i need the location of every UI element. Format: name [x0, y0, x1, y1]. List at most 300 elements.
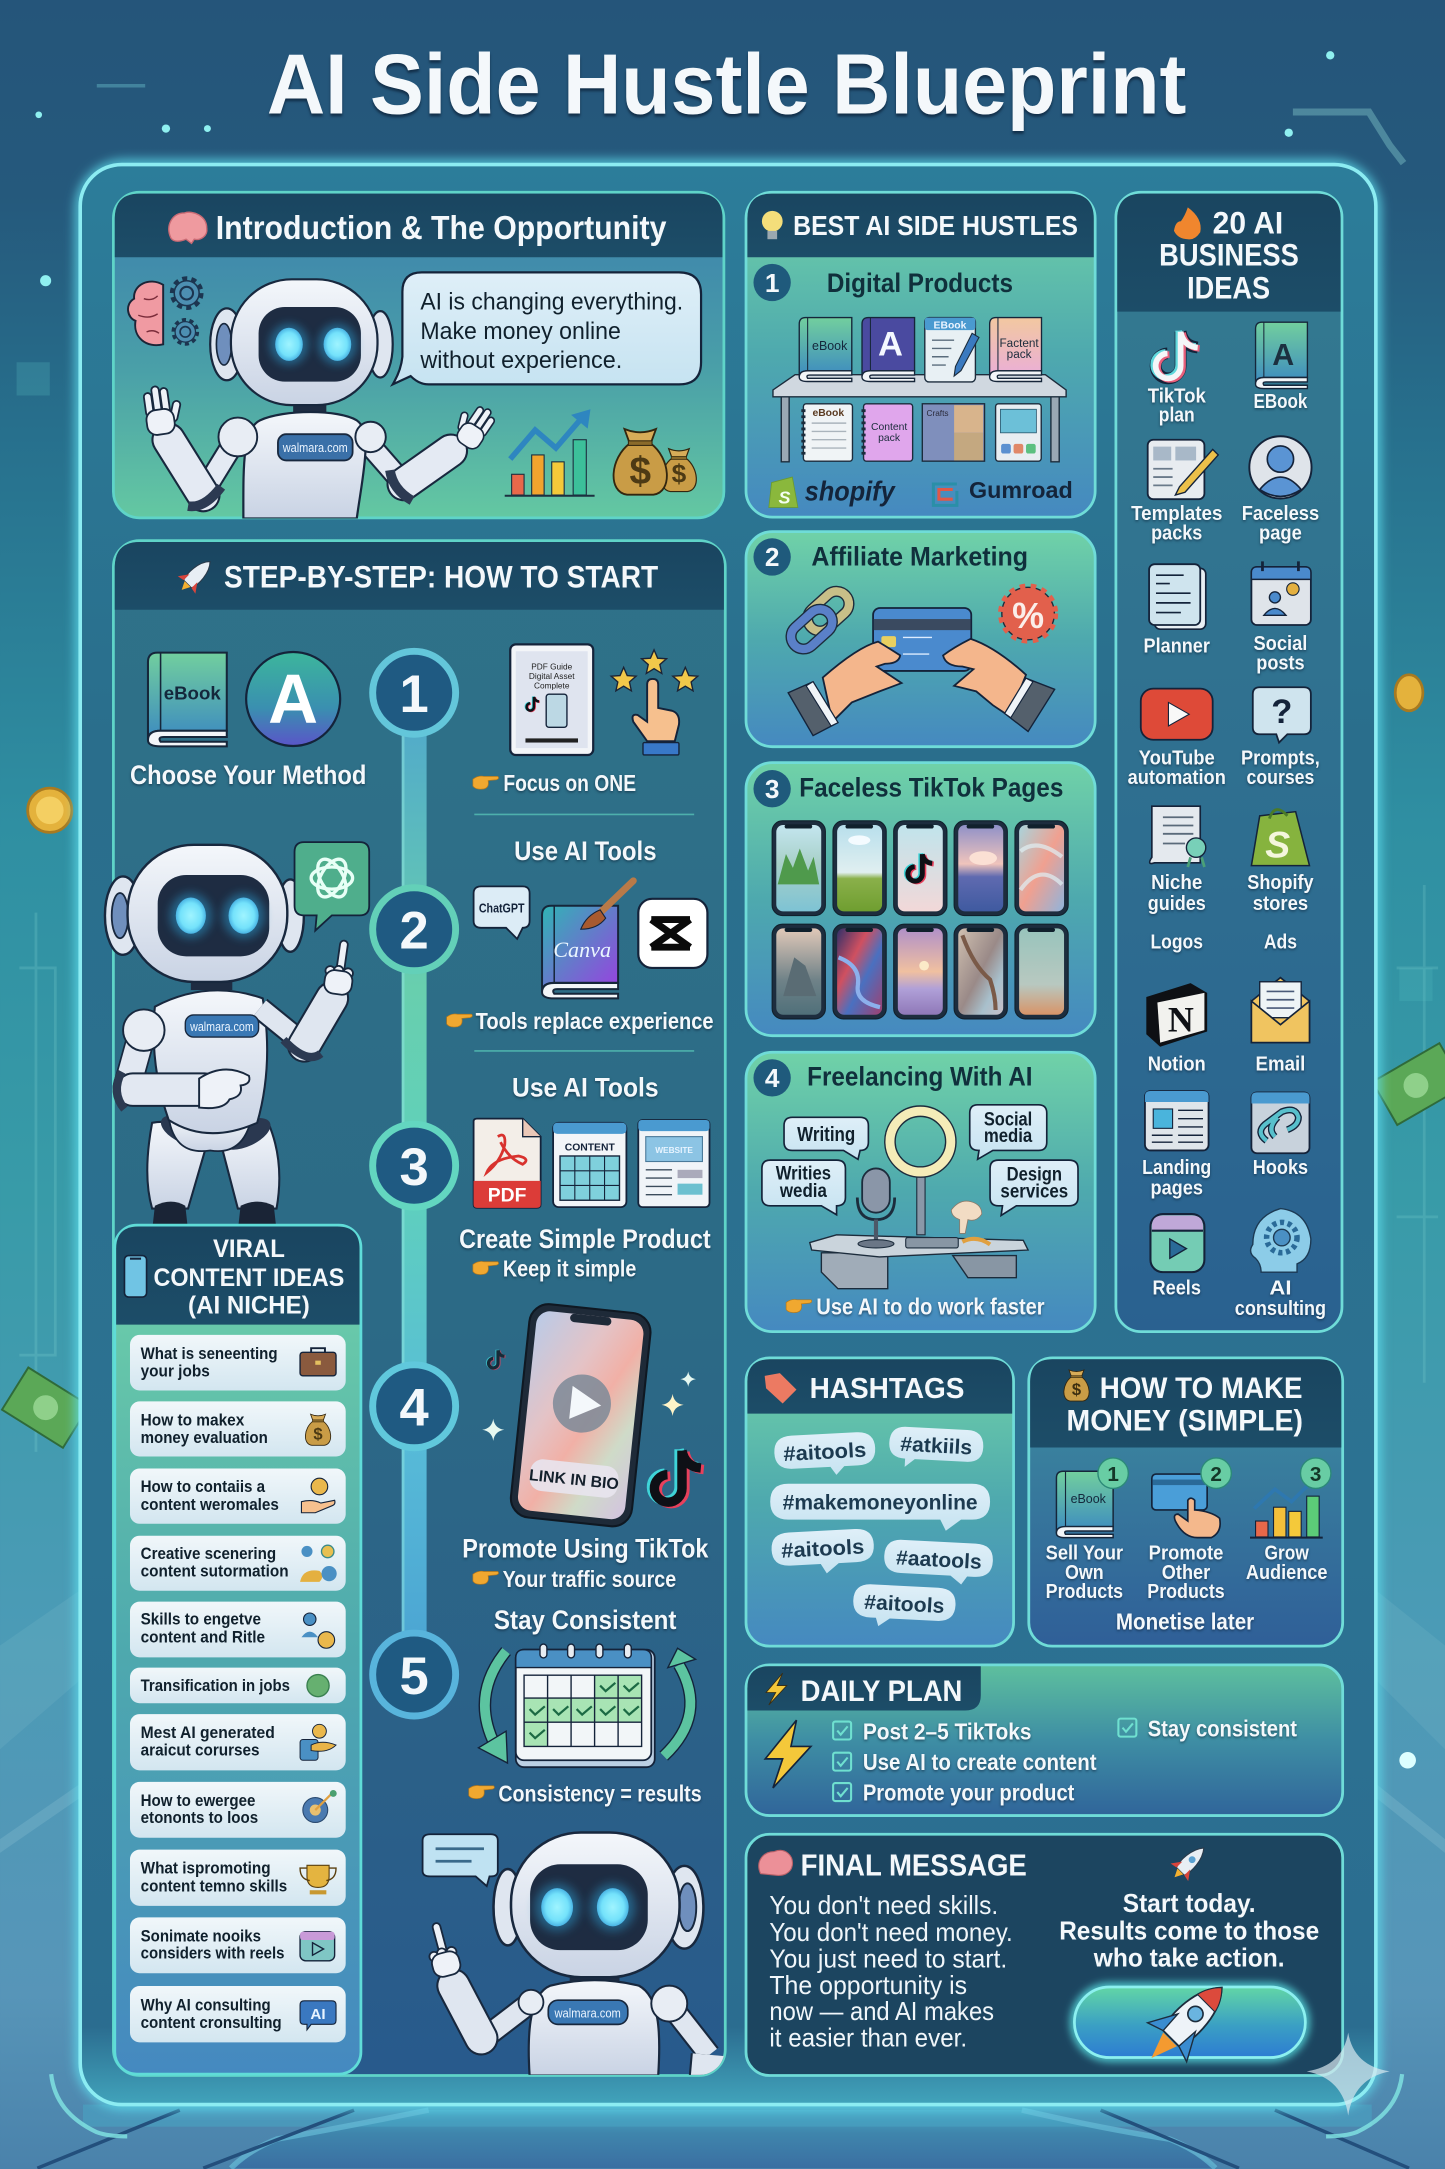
logo: gumroad: [933, 477, 1073, 505]
icon: microphone: [857, 1168, 895, 1248]
bubble: social media: Social: [984, 1108, 1032, 1130]
panel: viral content ideas: [115, 1225, 361, 2074]
panel: step-by-step: [105, 541, 725, 2102]
idea: shopify stores: Shopify: [1247, 872, 1314, 894]
checklist: [833, 1716, 1297, 1805]
bubble: design services: [990, 1160, 1078, 1215]
panel header: viral content: VIRAL: [213, 1235, 285, 1263]
number badge 1: [753, 264, 791, 301]
option: promote other products: [1147, 1458, 1231, 1603]
robot: bottom waving: [421, 1833, 709, 2102]
idea: social posts: Social: [1253, 633, 1307, 655]
text: final message body: The opportunity is: [769, 1972, 967, 2000]
hashtag chip 2: #atkiils: [900, 1433, 973, 1459]
icon: content pack: Content: [871, 422, 907, 433]
idea row 2: [130, 1401, 346, 1456]
icon: money bag: [305, 1414, 331, 1445]
icon: hands holding card: [788, 608, 1055, 736]
speech bubble: intro: Make money online: [420, 318, 621, 345]
number badge 3: [753, 770, 791, 807]
hashtag chip 1: #aitools: [783, 1439, 867, 1466]
panel: best ai side hustles card 1: [746, 192, 1095, 517]
idea row 11: content cronsulting: [141, 2013, 282, 2032]
idea row 6: [130, 1668, 346, 1703]
idea: notion: Notion: [1148, 1053, 1206, 1075]
heading: digital products: Digital Products: [827, 268, 1013, 298]
item: promote product: Promote your product: [863, 1779, 1075, 1805]
idea: ebook: EBook: [1253, 391, 1308, 413]
idea row 4: content sutormation: [141, 1561, 289, 1580]
icon: money bags: $: [629, 450, 651, 493]
idea: ai consulting: consulting: [1235, 1298, 1326, 1320]
icon: percent badge: %: [1012, 595, 1044, 636]
panel: final message: [746, 1834, 1343, 2077]
icon: AI chat bubble: AI: [310, 2006, 326, 2023]
chart: growth bars: [505, 409, 595, 496]
option: sell your own products: Sell Your: [1046, 1541, 1123, 1564]
icon: content calendar: [553, 1123, 626, 1207]
idea: social posts: [1251, 561, 1311, 674]
panel header: 20 ai business ideas: IDEAS: [1187, 271, 1270, 306]
panel header: introduction: Introduction & The Opportunity: [216, 210, 667, 247]
panel header: best ai side hustles: BEST AI SIDE HUSTLES: [793, 210, 1078, 241]
bubble: writing: Writing: [797, 1124, 855, 1146]
icon: image collage: [922, 404, 985, 461]
heading: use ai tools second: Use AI Tools: [512, 1073, 659, 1103]
idea row 9: content temno skills: [141, 1877, 287, 1896]
text: final message body: You don't need skills.: [769, 1892, 998, 1920]
icon: pdf: PDF: [488, 1185, 527, 1207]
option: grow audience: 3: [1310, 1463, 1321, 1486]
icon: pdf guide: [510, 644, 593, 755]
icon: light bulb: [762, 211, 783, 239]
panel: affiliate marketing: [746, 532, 1095, 747]
icon: website: WEBSITE: [655, 1145, 693, 1155]
icon: banknote right: [1372, 1043, 1445, 1125]
idea: niche guides: [1148, 806, 1206, 915]
bubble: writies wedia: wedia: [779, 1180, 827, 1202]
panel header: 20 ai business ideas: 20 AI: [1213, 206, 1283, 241]
speech bubble: intro: [393, 272, 701, 384]
button: rocket launch: [1074, 1968, 1305, 2077]
icon: hand with coin: [301, 1478, 335, 1513]
panel: 20 ai business ideas: [1116, 192, 1342, 1332]
idea: planner: [1144, 564, 1210, 658]
idea: templates packs: packs: [1151, 522, 1202, 544]
icon: money bags: $: [672, 459, 687, 489]
icon: big bolt: [765, 1720, 811, 1788]
icon: brain and gears: [128, 279, 201, 345]
icon: notebook: eBook: [812, 408, 844, 419]
idea row 1: What is seneenting: [141, 1344, 278, 1363]
icon: capcut: [638, 899, 707, 968]
step number 3: 3: [400, 1138, 429, 1197]
idea row 8: [130, 1782, 346, 1838]
idea: prompts courses: [1241, 687, 1320, 789]
icon: pdf guide: Complete: [534, 681, 570, 691]
idea: tiktok plan: TikTok: [1148, 385, 1207, 407]
phone 9: [954, 924, 1007, 1019]
icon: money bag: $: [1072, 1380, 1081, 1399]
step number 2: [373, 888, 456, 971]
panel header: viral content: (AI NICHE): [188, 1292, 310, 1320]
heading: final message: FINAL MESSAGE: [801, 1848, 1027, 1882]
icon: briefcase: [300, 1348, 336, 1376]
idea row 8: How to ewergee: [141, 1791, 255, 1810]
title: AI Side Hustle Blueprint: [267, 36, 1186, 132]
idea: shopify stores: [1247, 810, 1314, 915]
idea: prompts courses: ?: [1271, 693, 1292, 731]
idea: planner: Planner: [1144, 636, 1210, 658]
idea row 4: [130, 1536, 346, 1591]
icon: percent badge: [1000, 586, 1056, 641]
icon: content pack: pack: [878, 433, 901, 444]
idea row 10: considers with reels: [141, 1944, 284, 1963]
bubble: writies wedia: Writies: [776, 1162, 831, 1184]
step number 3: [373, 1124, 456, 1207]
panel header: best ai side hustles: [747, 194, 1094, 257]
heading: promote using tiktok: Promote Using TikTok: [462, 1534, 709, 1564]
idea: landing pages: [1142, 1091, 1211, 1200]
option: grow audience: Audience: [1246, 1561, 1327, 1584]
hashtag chip 2: [888, 1426, 984, 1471]
phone 2: [833, 821, 886, 916]
idea: tiktok plan: plan: [1159, 405, 1195, 427]
idea: shopify stores: stores: [1253, 893, 1308, 915]
text: call to action: Start today.: [1123, 1890, 1256, 1918]
panel: how to make money: [1029, 1358, 1343, 1646]
note: tools replace experience: Tools replace experience: [476, 1008, 714, 1034]
text: final message body: [769, 1892, 1013, 2052]
panel header: how to make money: [1030, 1359, 1341, 1447]
hashtag chip 3: #makemoneyonline: [783, 1490, 978, 1514]
icon: A book: [862, 318, 915, 382]
icon: chatgpt logo bubble: [295, 842, 369, 931]
idea: ai consulting: AI: [1269, 1277, 1292, 1299]
idea row 7: araicut corurses: [141, 1740, 260, 1759]
panel header: 20 ai business ideas: BUSINESS: [1159, 237, 1299, 272]
idea: notion: N: [1168, 1000, 1194, 1040]
hashtag chip 6: [852, 1583, 956, 1630]
option: promote other products: Promote: [1149, 1541, 1223, 1564]
idea row 9: What ispromoting: [141, 1859, 271, 1878]
icon: pdf guide: Digital Asset: [529, 671, 575, 681]
icon: pdf: [474, 1119, 541, 1208]
phone 1: [772, 821, 825, 916]
logo: shopify: S: [779, 487, 791, 507]
option: promote other products: Other: [1162, 1561, 1210, 1584]
logo: shopify: [769, 476, 896, 507]
icon: tiktok logo: [651, 1449, 704, 1504]
step number 4: [373, 1365, 456, 1448]
icon: ebook checklist: [925, 318, 979, 382]
option: sell your own products: eBook: [1071, 1492, 1107, 1506]
idea row 5: [130, 1602, 346, 1657]
icon: corner sparkle: [1307, 2033, 1390, 2116]
phone 8: [894, 924, 947, 1019]
idea: email: [1251, 978, 1309, 1075]
phone 7: [833, 924, 886, 1019]
panel header: introduction: [115, 194, 722, 257]
icon: ebook: eBook: [812, 339, 848, 353]
idea row 11: [130, 1986, 346, 2042]
idea: faceless page: Faceless: [1242, 503, 1319, 525]
idea row 7: [130, 1714, 346, 1770]
icon: ebook: [799, 318, 852, 382]
hashtag chip 3: [770, 1484, 990, 1531]
step number 1: [373, 651, 456, 734]
idea row 5: content and Ritle: [141, 1628, 265, 1647]
idea: niche guides: guides: [1148, 893, 1206, 915]
step number 4: 4: [400, 1379, 429, 1438]
idea: notion: [1146, 983, 1207, 1075]
idea row 10: [130, 1917, 346, 1973]
idea row 1: [130, 1335, 346, 1391]
label: choose your method: Choose Your Method: [130, 760, 366, 790]
idea: youtube automation: YouTube: [1139, 748, 1215, 770]
idea: hooks: Hooks: [1253, 1157, 1308, 1179]
phone 3: [894, 821, 947, 916]
idea: ai consulting: [1235, 1209, 1326, 1320]
panel header: 20 ai business ideas: [1117, 194, 1341, 312]
note: monetise later: Monetise later: [1116, 1609, 1254, 1635]
idea row 7: Mest AI generated: [141, 1723, 275, 1742]
icon: green globe: [307, 1675, 329, 1697]
icon: book and coin: [300, 1724, 336, 1760]
icon: chatgpt bubble: ChatGPT: [479, 901, 524, 916]
idea: youtube automation: [1128, 689, 1226, 789]
phone grid: [772, 821, 1068, 1019]
option: grow audience: Grow: [1265, 1541, 1310, 1564]
phone 10: [1015, 924, 1068, 1019]
option: grow audience: [1246, 1458, 1331, 1584]
option: sell your own products: [1046, 1458, 1128, 1603]
idea row 10: Sonimate nooiks: [141, 1926, 261, 1945]
phone 5: [1015, 821, 1068, 916]
panel: faceless tiktok pages: [746, 763, 1095, 1036]
panel header: hashtags: [747, 1359, 1012, 1414]
panel header: viral content: CONTENT IDEAS: [153, 1264, 344, 1292]
heading: use ai tools: Use AI Tools: [514, 836, 657, 866]
number badge 2: [753, 538, 791, 576]
icon: left cycle arrow: [478, 1651, 507, 1763]
text: final message body: it easier than ever.: [769, 2024, 967, 2052]
idea: niche guides: Niche: [1151, 872, 1202, 894]
idea row 4: Creative scenering: [141, 1544, 276, 1563]
bubble: social media: [970, 1105, 1047, 1159]
bubble: social media: media: [984, 1125, 1032, 1147]
hashtag chip 5: #aatools: [895, 1546, 982, 1574]
icon: gold coin right: [1395, 675, 1423, 711]
number badge 3: 3: [765, 774, 779, 804]
bubble: design services: services: [1000, 1180, 1068, 1202]
bubble: design services: Design: [1007, 1163, 1062, 1185]
icon: fire: [1174, 207, 1201, 239]
note: consistency equals results: Consistency = results: [498, 1781, 702, 1807]
icon: money bag: $: [313, 1424, 323, 1443]
idea: faceless page: page: [1259, 522, 1302, 544]
phone 4: [954, 821, 1007, 916]
icon: sparkles: [482, 1371, 696, 1441]
idea: logos: Logos: [1150, 932, 1203, 954]
option: sell your own products: Own: [1065, 1561, 1104, 1584]
icon: small rocket: [1166, 1839, 1213, 1886]
idea: landing pages: pages: [1150, 1178, 1203, 1200]
bubble: writies wedia: [762, 1160, 845, 1215]
hashtag chip 5: [883, 1539, 994, 1586]
idea: faceless page: [1242, 436, 1319, 544]
hashtag chip 1: [773, 1431, 876, 1478]
robot: chatgpt pointing: [105, 845, 358, 1231]
idea: templates packs: Templates: [1131, 503, 1222, 525]
icon: content pack: [864, 404, 913, 461]
logo: shopify: shopify: [805, 476, 896, 507]
panel header: step-by-step: [115, 542, 724, 610]
note: use ai to do work faster: Use AI to do work faster: [816, 1294, 1045, 1320]
heading: faceless tiktok pages: Faceless TikTok Pages: [799, 772, 1063, 802]
text: final message body: You just need to start.: [769, 1946, 1007, 1974]
shelf: digital products: [773, 318, 1066, 462]
step number 1: 1: [400, 665, 429, 724]
icon: desk setup: [810, 1201, 1028, 1289]
icon: banknote left: [2, 1367, 89, 1448]
phone 6: [772, 924, 825, 1019]
step number 5: [373, 1633, 456, 1716]
idea: prompts courses: Prompts,: [1241, 748, 1320, 770]
icon: right cycle arrow: [664, 1648, 696, 1756]
icon: trophy: [300, 1865, 336, 1894]
icon: target: [303, 1790, 337, 1822]
icon: notebook: [803, 404, 852, 461]
heading: affiliate marketing: Affiliate Marketing: [811, 542, 1028, 572]
option: sell your own products: 1: [1107, 1463, 1119, 1486]
idea: ebook: A: [1272, 338, 1294, 372]
idea: youtube automation: automation: [1128, 767, 1226, 789]
step number 2: 2: [400, 902, 429, 961]
panel header: hashtags: HASHTAGS: [810, 1373, 964, 1405]
text: call to action: [1059, 1890, 1319, 1973]
hashtag chip 4: [771, 1528, 875, 1576]
text: final message body: You don't need money.: [769, 1919, 1013, 1947]
idea row 9: [130, 1850, 346, 1906]
icon: tilted phone: LINK IN BIO: [528, 1467, 620, 1493]
idea row 2: How to makex: [141, 1410, 245, 1429]
speech bubble: intro: without experience.: [419, 347, 622, 374]
panel: daily plan: [746, 1665, 1343, 1816]
icon: chatgpt bubble: [474, 886, 530, 939]
icon: gold coin left: [28, 788, 72, 832]
robot: bottom waving: walmara.com: [554, 2005, 621, 2020]
icon: person and coin: [301, 1613, 335, 1648]
robot: chatgpt pointing: walmara.com: [189, 1020, 254, 1034]
icon: factent pack: Factent: [1000, 337, 1039, 350]
idea: reels: [1150, 1214, 1204, 1299]
idea row 3: [130, 1468, 346, 1524]
icon: chain links: [786, 586, 854, 654]
option: sell your own products: Products: [1046, 1580, 1123, 1603]
panel header: daily plan: [747, 1666, 981, 1710]
icon: A logo: A: [268, 660, 318, 738]
icon: phone: [124, 1256, 147, 1297]
icon: ebook: eBook: [164, 683, 221, 704]
icon: rocket: [1132, 1968, 1241, 2077]
heading: freelancing with ai: Freelancing With AI: [807, 1061, 1033, 1091]
idea: ebook: [1253, 322, 1308, 413]
icon: small bolt: [766, 1673, 787, 1705]
icon: AI chat bubble: [300, 2001, 336, 2030]
icon: small tiktok note: [488, 1350, 505, 1368]
heading: create simple product: Create Simple Product: [459, 1224, 711, 1254]
icon: tablet: [996, 404, 1041, 461]
number badge 2: 2: [765, 542, 779, 572]
icon: image collage: Crafts: [926, 408, 949, 418]
item: use ai: Use AI to create content: [863, 1749, 1097, 1775]
icon: ring light: [890, 1111, 951, 1235]
text: call to action: Results come to those: [1059, 1917, 1319, 1945]
idea row 5: Skills to engetve: [141, 1610, 261, 1629]
icon: website: [638, 1120, 710, 1207]
hashtag chip 6: #aitools: [864, 1591, 945, 1618]
idea: social posts: posts: [1256, 652, 1305, 674]
logo: gumroad: Gumroad: [969, 477, 1073, 503]
icon: A logo: [246, 652, 340, 746]
idea row 1: your jobs: [141, 1362, 210, 1381]
speech bubble: intro: AI is changing everything.: [420, 289, 683, 316]
idea row 11: Why AI consulting: [141, 1996, 271, 2015]
hashtag chip 4: #aitools: [781, 1535, 865, 1563]
icon: money bags: [614, 429, 696, 495]
icon: reel clip: [300, 1932, 335, 1961]
panel header: how to make money: HOW TO MAKE: [1100, 1372, 1303, 1405]
idea row 8: etononts to loos: [141, 1808, 258, 1827]
option: promote other products: 2: [1210, 1463, 1222, 1486]
panel: hashtags: [746, 1358, 1014, 1646]
idea: tiktok plan: [1148, 331, 1207, 427]
note: keep it simple: Keep it simple: [503, 1255, 636, 1281]
number badge 4: 4: [765, 1063, 780, 1093]
icon: pdf guide: PDF Guide: [531, 661, 573, 671]
icon: ebook: [148, 653, 227, 746]
icon: factent pack: pack: [1007, 348, 1032, 361]
icon: creative cluster: [300, 1545, 337, 1582]
icon: content calendar: CONTENT: [565, 1142, 615, 1153]
note: your traffic source: Your traffic source: [503, 1566, 676, 1592]
idea: hooks: [1251, 1092, 1309, 1179]
idea: landing pages: Landing: [1142, 1157, 1211, 1179]
idea row 3: content weromales: [141, 1495, 279, 1514]
text: final message body: now — and AI makes: [769, 1998, 994, 2026]
icon: calendar with checks: [516, 1644, 655, 1767]
icon: factent pack: [990, 318, 1042, 382]
robot: intro: walmara.com: [282, 441, 348, 455]
idea: reels: Reels: [1153, 1277, 1201, 1299]
icon: price tag: [765, 1373, 796, 1404]
icon: brain: [169, 212, 207, 243]
idea: templates packs: [1131, 440, 1222, 544]
panel: introduction and opportunity: [113, 192, 724, 519]
robot: intro: [142, 279, 499, 519]
step number 5: 5: [400, 1647, 429, 1706]
panel header: daily plan: DAILY PLAN: [801, 1675, 962, 1708]
heading: stay consistent: Stay Consistent: [494, 1605, 676, 1635]
option: promote other products: Products: [1147, 1580, 1225, 1603]
panel header: viral content: [116, 1227, 360, 1325]
icon: tilted phone: [509, 1302, 652, 1528]
idea: ads: Ads: [1264, 932, 1297, 954]
note: focus on one: Focus on ONE: [503, 770, 636, 796]
idea row 3: How to contaiis a: [141, 1477, 266, 1496]
idea: shopify stores: S: [1265, 823, 1290, 865]
